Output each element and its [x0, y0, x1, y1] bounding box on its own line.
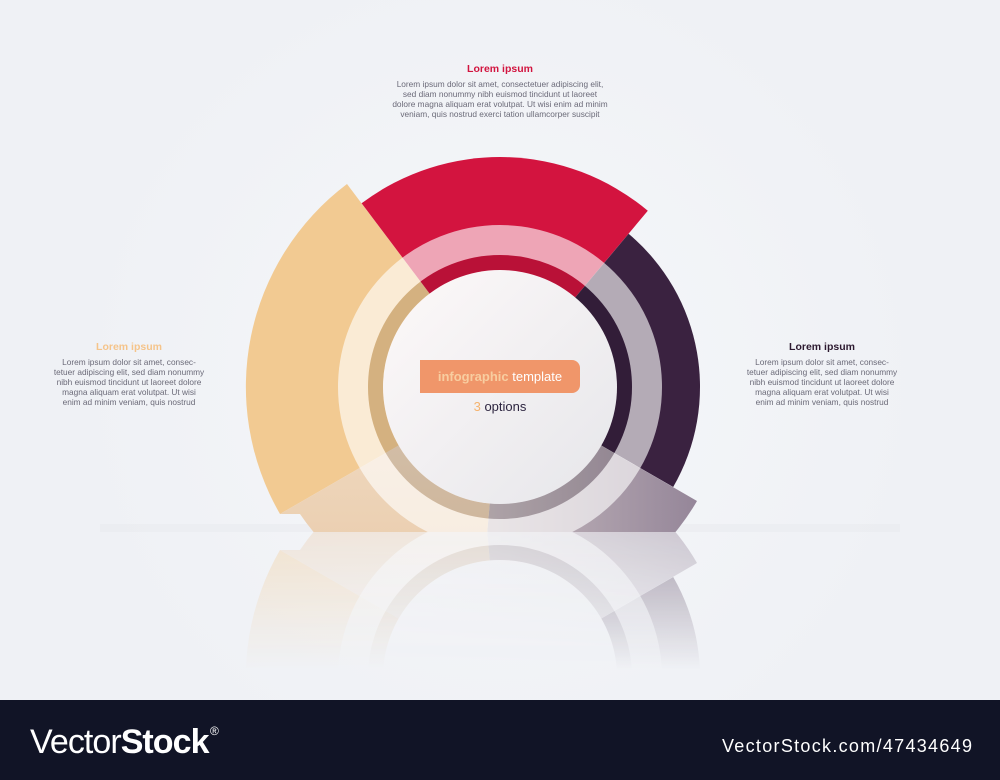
text block: left: enim ad minim veniam, quis nostrud — [63, 397, 196, 407]
text block: right: Lorem ipsum dolor sit amet, consec- — [755, 357, 889, 367]
center label: 3 options — [474, 399, 527, 414]
text block: right: enim ad minim veniam, quis nostrud — [756, 397, 889, 407]
text block: top: dolore magna aliquam erat volutpat. Ut wisi enim ad minim — [392, 99, 608, 109]
center label — [420, 360, 580, 414]
text block: top: Lorem ipsum — [467, 63, 533, 75]
footer bar — [0, 700, 1000, 780]
text block: top: veniam, quis nostrud exerci tation ullamcorper suscipit — [400, 109, 600, 119]
footer bar: ® — [210, 724, 219, 738]
text block: left: tetuer adipiscing elit, sed diam nonummy — [54, 367, 205, 377]
footer bar: VectorStock — [30, 723, 210, 761]
text block: top — [392, 63, 608, 119]
footer bar: VectorStock.com/47434649 — [722, 736, 972, 756]
text block: left: magna aliquam erat volutpat. Ut wisi — [62, 387, 196, 397]
text block: right: tetuer adipiscing elit, sed diam nonummy — [747, 367, 898, 377]
text block: right: magna aliquam erat volutpat. Ut wisi — [755, 387, 889, 397]
text block: left: Lorem ipsum dolor sit amet, consec- — [62, 357, 196, 367]
floor shadow — [100, 524, 900, 532]
text block: top: Lorem ipsum dolor sit amet, consectetuer adipiscing elit, — [397, 79, 603, 89]
pie chart — [246, 157, 700, 532]
text block: right — [747, 341, 898, 407]
text block: right: nibh euismod tincidunt ut laoreet dolore — [750, 377, 895, 387]
reflection — [248, 532, 698, 657]
text block: left: nibh euismod tincidunt ut laoreet dolore — [57, 377, 202, 387]
text block: right: Lorem ipsum — [789, 341, 855, 353]
text block: left — [54, 341, 205, 407]
text block: left: Lorem ipsum — [96, 341, 162, 353]
center label: infographic template — [438, 369, 562, 384]
text block: top: sed diam nonummy nibh euismod tincidunt ut laoreet — [403, 89, 598, 99]
